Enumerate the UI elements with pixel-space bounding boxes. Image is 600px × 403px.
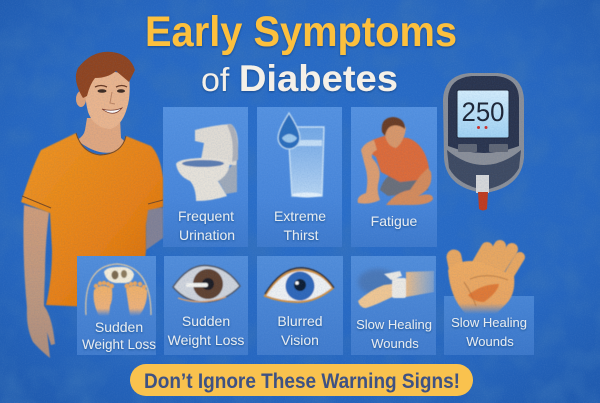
banner: warning call to action xyxy=(130,364,473,396)
head xyxy=(85,71,130,129)
icon: blue eye xyxy=(265,268,334,302)
meter body xyxy=(443,73,524,193)
icon: bandaged wrist xyxy=(358,271,434,308)
panel: slow healing wounds (hand) xyxy=(444,246,534,355)
orange shirt xyxy=(21,133,163,309)
person xyxy=(21,52,163,358)
meter reading: 250 xyxy=(462,97,504,127)
label: extreme thirst: Extreme xyxy=(274,208,326,224)
icon: tired seated man xyxy=(358,117,433,205)
meter buttons xyxy=(458,144,508,152)
title: Early Symptoms xyxy=(145,8,457,56)
label: wounds: Wounds xyxy=(371,336,419,351)
icon: glass of water xyxy=(288,127,324,198)
icon: feet on scale xyxy=(86,264,151,316)
face details xyxy=(95,86,127,113)
meter red indicators xyxy=(477,126,488,129)
label: slow healing: Slow Healing xyxy=(451,315,527,330)
ear xyxy=(76,91,86,107)
label: frequent urination: Frequent xyxy=(178,208,234,224)
icon: open hand xyxy=(448,246,520,314)
label: weight loss: Weight Loss xyxy=(168,332,244,348)
test strip xyxy=(476,175,489,210)
label: wounds: Wounds xyxy=(466,334,514,349)
label: fatigue: Fatigue xyxy=(371,213,418,229)
panel: frequent urination xyxy=(163,107,248,247)
panel: sudden weight loss (feet) xyxy=(77,256,156,355)
sleeve and collar lines xyxy=(22,133,163,208)
icon: toilet xyxy=(176,124,238,201)
panel: extreme thirst xyxy=(257,107,342,247)
panel: slow healing wounds (wrist) xyxy=(351,256,436,355)
label: thirst line two: Thirst xyxy=(284,227,319,243)
icon: shadow behind wrist xyxy=(358,269,398,295)
panel: fatigue xyxy=(351,107,437,247)
banner: warning call to action: Don’t Ignore These Warning Signs! xyxy=(144,370,460,393)
neck xyxy=(77,118,126,153)
label: sudden: Sudden xyxy=(95,319,143,335)
title xyxy=(145,8,457,99)
label: sudden: Sudden xyxy=(182,313,230,329)
icon: wound on palm xyxy=(468,284,499,302)
panel: blurred vision xyxy=(257,256,343,355)
label: vision: Vision xyxy=(281,332,319,348)
label: weight loss: Weight Loss xyxy=(82,337,156,352)
hair xyxy=(76,52,135,98)
title: of Diabetes xyxy=(201,58,398,99)
panel: sudden weight loss (eye) xyxy=(164,256,248,355)
label: slow healing: Slow Healing xyxy=(356,317,432,332)
icon: brown eye xyxy=(173,265,240,302)
left arm xyxy=(23,205,55,358)
right arm stub xyxy=(146,206,163,250)
label: urination line two: Urination xyxy=(179,227,235,243)
glucose meter xyxy=(443,73,524,210)
meter screen xyxy=(457,90,509,138)
icon: water drop xyxy=(278,113,300,149)
label: blurred: Blurred xyxy=(277,313,323,329)
